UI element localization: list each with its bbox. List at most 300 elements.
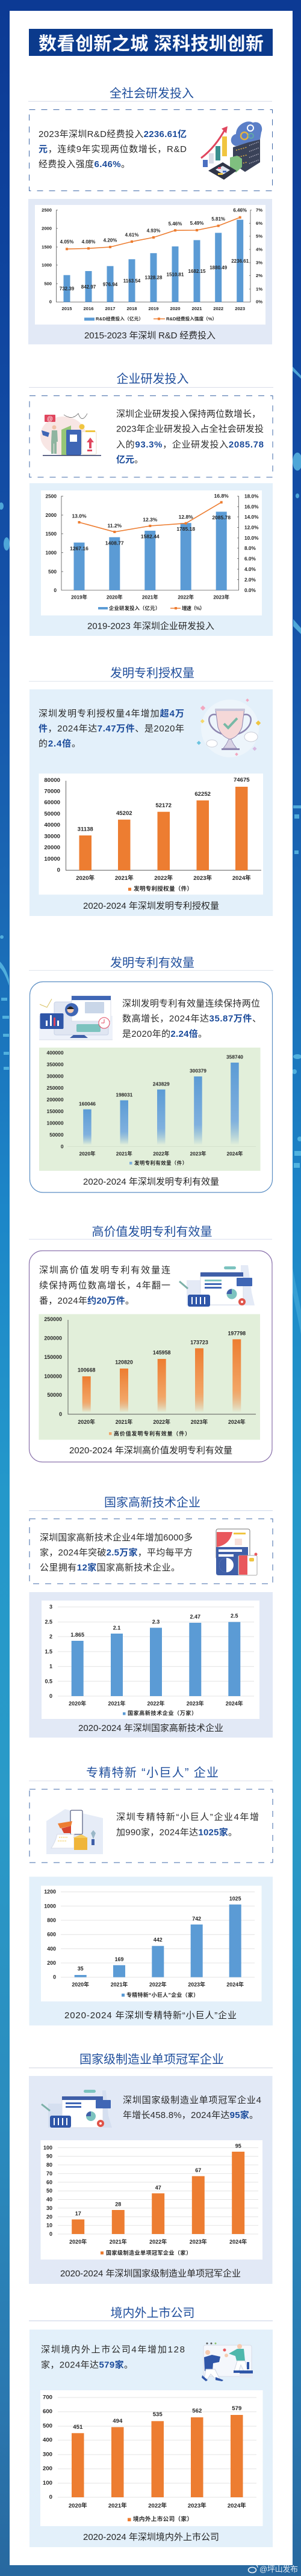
icon: person with documents: [40, 414, 101, 456]
text block: 深圳企业研发投入保持两位数增长，: [116, 409, 261, 420]
text block: 深圳高价值发明专利有效量连: [39, 1265, 170, 1275]
bar chart: valid invention patents: 2022年: [153, 1151, 170, 1157]
combo chart: R&D spending and intensity: 1500: [42, 244, 52, 250]
icon: person with documents: @: [47, 416, 53, 423]
chart panel: [29, 483, 273, 636]
panel: [29, 2330, 273, 2547]
combo chart: R&D spending and intensity: 1328.28: [145, 275, 163, 280]
icon: documents and phone: [216, 1529, 258, 1575]
bar chart: high-value invention patents: 2021年: [116, 1418, 132, 1425]
combo chart: R&D spending and intensity: 5.46%: [169, 221, 182, 227]
bar chart: national high-tech enterprises: 2: [49, 1634, 52, 1640]
bar chart: national high-tech enterprises: 2.5: [231, 1613, 238, 1619]
caption: 2020-2024 年深圳专精特新“小巨人”企业: [64, 2010, 237, 2021]
text block: 加990家，2024年达1025家。: [116, 1827, 237, 1838]
caption: 2019-2023 年深圳企业研发投入: [87, 620, 214, 631]
text block: 家，2024年达579家。: [41, 2360, 133, 2370]
chart panel: [28, 199, 272, 344]
text block: 深圳境内外上市公司4年增加128: [41, 2344, 185, 2355]
bar chart: high-value invention patents: 100000: [44, 1373, 62, 1379]
bar chart: valid invention patents: 0: [61, 1143, 64, 1149]
combo chart: R&D spending and intensity: 3%: [256, 260, 262, 266]
bar chart: little giant enterprises: 1000: [44, 1903, 56, 1909]
combo chart: enterprise R&D and growth: 2022年: [178, 594, 194, 600]
text block: 入的93.3%，企业研发投入2085.78: [116, 439, 264, 450]
heading: 境内外上市公司: [111, 2306, 195, 2320]
bar chart: invention patent grants: 74675: [234, 777, 250, 784]
bar chart: invention patent grants: 2020年: [76, 874, 95, 882]
text block: [116, 1811, 259, 1838]
rounded panel: [30, 982, 272, 1192]
combo chart: R&D spending and intensity: 1510.81: [167, 272, 184, 278]
callout box: [29, 1519, 273, 1584]
combo chart: R&D spending and intensity: 5.81%: [211, 216, 225, 222]
combo chart: R&D spending and intensity: 732.39: [60, 286, 75, 291]
caption: 2020-2024 年深圳国家高新技术企业: [78, 1723, 223, 1733]
bar chart: high-value invention patents: 145958: [153, 1350, 171, 1356]
combo chart: R&D spending and intensity: 2021: [192, 306, 202, 311]
combo chart: R&D spending and intensity: 2019: [149, 306, 158, 311]
bar chart: high-value invention patents: 50000: [47, 1392, 62, 1398]
caption: 2020-2024 年深圳国家级制造业单项冠军企业: [60, 2268, 241, 2279]
bar chart: high-value invention patents: 173723: [190, 1339, 208, 1345]
caption: 2020-2024 年深圳发明专利有效量: [83, 1177, 219, 1187]
bar chart: single-item champions: 28: [115, 2201, 121, 2207]
bar chart: little giant enterprises: 1025: [229, 1896, 241, 1902]
bar chart: single-item champions: [41, 2140, 262, 2260]
combo chart: enterprise R&D and growth: 1000: [46, 549, 57, 555]
bar chart: national high-tech enterprises: 2.1: [113, 1625, 120, 1631]
bar chart: valid invention patents: 300379: [190, 1068, 206, 1074]
combo chart: R&D spending and intensity: 2500: [42, 207, 52, 213]
bar chart: invention patent grants: 20000: [44, 844, 60, 851]
heading: 企业研发投入: [117, 372, 189, 386]
section: 企业研发投入: [29, 372, 273, 636]
legend: 专精特新“小巨人”企业（家）: [126, 1991, 199, 1998]
bar chart: single-item champions: 30: [46, 2205, 52, 2211]
section: 全社会研发投入: [28, 87, 272, 344]
combo chart: R&D spending and intensity: 2017: [105, 306, 115, 311]
combo chart: enterprise R&D and growth: 2021年: [142, 594, 158, 600]
bar chart: national high-tech enterprises: 2.3: [152, 1619, 160, 1625]
bar chart: listed companies: [40, 2390, 262, 2526]
bar chart: single-item champions: 50: [46, 2188, 52, 2194]
combo chart: R&D spending and intensity: 2%: [256, 273, 262, 278]
combo chart: R&D spending and intensity: 2016: [84, 306, 93, 311]
bar chart: little giant enterprises: 442: [154, 1937, 163, 1943]
bar chart: little giant enterprises: 2024年: [226, 1981, 244, 1988]
combo chart: enterprise R&D and growth: 10.0%: [244, 535, 259, 541]
bar chart: little giant enterprises: 0: [53, 1974, 56, 1980]
combo chart: R&D spending and intensity: 5.49%: [190, 221, 203, 226]
section: 专精特新“小巨人”企业: [29, 1766, 273, 2025]
caption: 2020-2024 年深圳发明专利授权量: [83, 901, 219, 911]
callout box: [29, 1789, 273, 1863]
combo chart: R&D spending and intensity: 0%: [256, 299, 262, 304]
combo chart: enterprise R&D and growth: 2019年: [71, 594, 87, 600]
bar chart: national high-tech enterprises: 2022年: [147, 1700, 165, 1707]
combo chart: enterprise R&D and growth: 1408.77: [105, 540, 124, 546]
bar chart: little giant enterprises: 800: [47, 1917, 56, 1923]
combo chart: enterprise R&D and growth: 1267.16: [70, 545, 88, 551]
title banner: 数看创新之城 深科技圳创新: [39, 34, 264, 54]
bar chart: listed companies: 2024年: [228, 2502, 246, 2509]
bar chart: listed companies: 2022年: [148, 2502, 167, 2509]
bar chart: little giant enterprises: 2021年: [111, 1981, 128, 1988]
combo chart: R&D spending and intensity: 0: [49, 299, 52, 304]
bar chart: little giant enterprises: 1200: [44, 1889, 56, 1895]
bar chart: listed companies: 200: [43, 2465, 52, 2472]
text block: 数高增长，2024年达35.87万件、: [122, 1013, 261, 1024]
bar chart: valid invention patents: 358740: [226, 1054, 243, 1060]
callout box: [29, 109, 272, 191]
bar chart: listed companies: 600: [43, 2408, 52, 2415]
combo chart: enterprise R&D and growth: 13.0%: [72, 513, 87, 519]
text block: 深圳专精特新“小巨人”企业4年增: [116, 1811, 259, 1822]
bar chart: invention patent grants: 0: [57, 867, 60, 874]
bar chart: invention patent grants: 2023年: [193, 874, 213, 882]
bar chart: listed companies: 562: [192, 2408, 202, 2414]
bar chart: high-value invention patents: 2020年: [78, 1418, 95, 1425]
bar chart: little giant enterprises: 400: [47, 1946, 56, 1952]
bar chart: listed companies: 100: [43, 2480, 52, 2486]
combo chart: enterprise R&D and growth: 500: [48, 569, 57, 575]
text block: [39, 129, 187, 169]
text block: 番，2024年约20万件。: [39, 1296, 134, 1306]
combo chart: enterprise R&D and growth: 1582.44: [141, 534, 160, 540]
bar chart: single-item champions: 60: [46, 2179, 52, 2185]
icon: cloud server and growth chart: [201, 121, 262, 180]
bar chart: national high-tech enterprises: 2020年: [69, 1700, 86, 1707]
combo chart: R&D spending and intensity: 4.05%: [60, 239, 73, 245]
bar chart: single-item champions: 80: [46, 2162, 52, 2168]
bar chart: little giant enterprises: 600: [47, 1932, 56, 1938]
combo chart: enterprise R&D and growth: 1500: [46, 531, 57, 537]
icon: trophy: [197, 698, 261, 757]
combo chart: R&D spending and intensity: 4.61%: [125, 232, 138, 238]
bar chart: invention patent grants: [39, 774, 263, 894]
bar chart: valid invention patents: 400000: [47, 1049, 64, 1055]
combo chart: R&D spending and intensity: 5%: [256, 233, 262, 239]
bar chart: high-value invention patents: 150000: [44, 1354, 62, 1360]
bar chart: listed companies: 500: [43, 2423, 52, 2429]
chart panel: [29, 1592, 273, 1738]
bar chart: national high-tech enterprises: 2.5: [45, 1619, 52, 1625]
bar chart: little giant enterprises: [41, 1886, 261, 2001]
section: 高价值发明专利有效量: [29, 1225, 272, 1462]
bar chart: valid invention patents: 250000: [47, 1085, 64, 1091]
bar chart: national high-tech enterprises: 1.5: [45, 1649, 52, 1655]
bar chart: single-item champions: 17: [75, 2211, 81, 2217]
bar chart: listed companies: 494: [113, 2418, 123, 2425]
combo chart: R&D spending and intensity: 842.97: [81, 284, 96, 290]
bar chart: single-item champions: 40: [46, 2196, 52, 2202]
bar chart: invention patent grants: 30000: [44, 833, 60, 840]
combo chart: enterprise R&D and growth: 2023年: [213, 594, 229, 600]
bar chart: listed companies: 400: [43, 2437, 52, 2444]
bar chart: invention patent grants: 2022年: [154, 874, 173, 882]
combo chart: enterprise R&D and growth: 18.0%: [244, 493, 259, 499]
text block: [123, 2095, 261, 2120]
bar chart: single-item champions: 70: [46, 2170, 52, 2176]
combo chart: R&D spending and intensity: 2236.61: [231, 258, 249, 264]
text block: 件，2024年达7.47万件、是2020年: [39, 724, 184, 734]
bar chart: valid invention patents: 243829: [153, 1081, 170, 1087]
bar chart: valid invention patents: 2024年: [226, 1151, 243, 1157]
bar chart: little giant enterprises: 742: [192, 1915, 201, 1921]
bar chart: valid invention patents: 100000: [47, 1120, 64, 1126]
bar chart: national high-tech enterprises: 1.865: [70, 1632, 84, 1638]
bar chart: national high-tech enterprises: 2024年: [226, 1700, 243, 1707]
bar chart: invention patent grants: 50000: [44, 811, 60, 817]
bar chart: single-item champions: 67: [195, 2167, 201, 2173]
text block: 2023年深圳R&D经费投入2236.61亿: [39, 129, 187, 139]
heading: 国家高新技术企业: [104, 1495, 200, 1510]
section: 境内外上市公司: [29, 2306, 273, 2547]
combo chart: enterprise R&D and growth: 0.0%: [244, 587, 256, 593]
combo chart: R&D spending and intensity: 4%: [256, 246, 262, 252]
bar chart: high-value invention patents: 120820: [115, 1360, 133, 1366]
icon: monitor dashboard with avatar: [39, 996, 113, 1040]
bar chart: invention patent grants: 40000: [44, 822, 60, 828]
heading: 国家级制造业单项冠军企业: [79, 2053, 224, 2066]
bar chart: invention patent grants: 2021年: [115, 874, 134, 882]
text block: [41, 2344, 185, 2370]
combo chart: R&D spending and intensity: 4.20%: [104, 238, 117, 243]
text block: [40, 1532, 193, 1573]
bar chart: single-item champions: 95: [235, 2143, 241, 2149]
heading: 全社会研发投入: [110, 87, 194, 100]
bar chart: single-item champions: 100: [43, 2144, 52, 2150]
bar chart: invention patent grants: 31138: [78, 826, 93, 833]
bar chart: national high-tech enterprises: [42, 1601, 259, 1719]
caption: 2020-2024 年深圳高价值发明专利有效量: [69, 1445, 232, 1456]
bar chart: valid invention patents: [39, 1048, 260, 1171]
heading: 发明专利有效量: [110, 956, 194, 970]
text block: [39, 708, 184, 749]
icon: two people shaking hands: [202, 2343, 253, 2381]
combo chart: R&D spending and intensity: 2018: [127, 306, 137, 311]
combo chart: enterprise R&D and growth: 1785.18: [176, 526, 195, 532]
bar chart: national high-tech enterprises: 2021年: [108, 1700, 126, 1707]
legend: [98, 605, 205, 611]
bar chart: listed companies: 2021年: [108, 2502, 127, 2509]
bar chart: single-item champions: 2020年: [69, 2238, 87, 2245]
bar chart: national high-tech enterprises: 1: [49, 1664, 52, 1670]
bar chart: invention patent grants: 52172: [155, 802, 172, 809]
bar chart: high-value invention patents: [39, 1314, 260, 1440]
text block: [122, 999, 261, 1039]
caption: 2015-2023 年深圳 R&D 经费投入: [84, 331, 216, 341]
bar chart: valid invention patents: 150000: [47, 1108, 64, 1114]
text block: [116, 409, 264, 465]
legend: 高价值发明专利有效量（件）: [114, 1430, 190, 1436]
text block: 续保持两位数高增长，4年翻一: [39, 1280, 170, 1291]
bar chart: valid invention patents: 2023年: [190, 1151, 206, 1157]
legend: 企业研发投入（亿元）: [109, 605, 160, 611]
combo chart: R&D spending and intensity: [42, 207, 262, 322]
icon: report document with charts: [179, 1265, 255, 1307]
legend: R&D经费投入强度（%）: [166, 316, 217, 322]
heading: 专精特新 “小巨人” 企业: [86, 1766, 219, 1780]
text block: 元，连续9年实现两位数增长，R&D: [39, 144, 187, 154]
bar chart: invention patent grants: 45202: [116, 810, 132, 817]
combo chart: R&D spending and intensity: 1000: [42, 262, 52, 268]
bar chart: single-item champions: 2023年: [190, 2238, 207, 2245]
combo chart: enterprise R&D and growth: [46, 493, 259, 611]
combo chart: enterprise R&D and growth: 16.8%: [214, 493, 229, 499]
caption: 2020-2024 年深圳境内外上市公司: [83, 2532, 219, 2542]
combo chart: enterprise R&D and growth: 14.0%: [244, 514, 259, 520]
text block: 深圳发明专利授权量4年增加超4万: [39, 708, 184, 719]
combo chart: R&D spending and intensity: 6.46%: [233, 208, 247, 213]
combo chart: enterprise R&D and growth: 12.8%: [179, 514, 193, 520]
panel: [29, 2076, 272, 2284]
bar chart: single-item champions: 10: [46, 2223, 52, 2229]
bar chart: high-value invention patents: 100668: [78, 1367, 96, 1373]
bar chart: little giant enterprises: 200: [47, 1960, 56, 1966]
chart panel: [29, 1876, 273, 2025]
combo chart: R&D spending and intensity: 1%: [256, 286, 262, 292]
bar chart: national high-tech enterprises: 0.5: [45, 1678, 52, 1684]
bar chart: high-value invention patents: 2024年: [228, 1418, 246, 1425]
combo chart: enterprise R&D and growth: 11.2%: [107, 522, 122, 528]
text block: 是2020年的2.24倍。: [122, 1028, 207, 1039]
legend: [84, 316, 217, 322]
combo chart: enterprise R&D and growth: 8.0%: [244, 545, 256, 551]
bar chart: high-value invention patents: 197798: [228, 1330, 246, 1336]
bar chart: listed companies: 2020年: [69, 2502, 87, 2509]
combo chart: enterprise R&D and growth: 2.0%: [244, 577, 256, 583]
text block: 经费投入强度6.46%。: [39, 159, 130, 169]
title banner: [29, 29, 273, 56]
combo chart: R&D spending and intensity: 1163.54: [123, 278, 141, 284]
bar chart: listed companies: 700: [43, 2394, 52, 2401]
bar chart: listed companies: 2023年: [188, 2502, 206, 2509]
combo chart: R&D spending and intensity: 1880.49: [209, 265, 228, 270]
combo chart: R&D spending and intensity: 500: [44, 281, 52, 286]
bar chart: little giant enterprises: 35: [78, 1966, 84, 1972]
bar chart: valid invention patents: 50000: [49, 1132, 64, 1138]
section: 国家高新技术企业: [29, 1495, 273, 1738]
text block: 亿元。: [116, 454, 143, 465]
combo chart: enterprise R&D and growth: 4.0%: [244, 566, 256, 572]
combo chart: R&D spending and intensity: 6%: [256, 221, 262, 226]
callout box: [29, 395, 273, 477]
text block: 家，2024年突破2.5万家，平均每平方: [40, 1547, 193, 1558]
text block: 的2.4倍。: [39, 738, 81, 749]
bar chart: valid invention patents: 350000: [47, 1061, 64, 1067]
combo chart: enterprise R&D and growth: 0: [54, 587, 57, 593]
bar chart: invention patent grants: 60000: [44, 799, 60, 806]
bar chart: invention patent grants: 70000: [44, 789, 60, 795]
panel: [29, 689, 273, 916]
heading: 高价值发明专利有效量: [92, 1225, 212, 1239]
combo chart: R&D spending and intensity: 2015: [62, 306, 72, 311]
bar chart: national high-tech enterprises: 0: [49, 1693, 52, 1699]
bar chart: single-item champions: 2024年: [229, 2238, 247, 2245]
bar chart: invention patent grants: 2024年: [232, 874, 251, 882]
bar chart: high-value invention patents: 2023年: [191, 1418, 208, 1425]
legend: 国家高新技术企业（万家）: [128, 1710, 197, 1717]
section: 发明专利授权量: [29, 666, 273, 916]
bar chart: national high-tech enterprises: 2023年: [187, 1700, 204, 1707]
bar chart: listed companies: 579: [232, 2405, 241, 2412]
combo chart: enterprise R&D and growth: 2000: [46, 512, 57, 518]
bar chart: listed companies: 0: [49, 2494, 52, 2500]
bar chart: valid invention patents: 2020年: [79, 1151, 96, 1157]
bar chart: single-item champions: 47: [155, 2185, 161, 2191]
icon: phone, calendar and box: [46, 1809, 103, 1854]
combo chart: enterprise R&D and growth: 2500: [46, 493, 57, 499]
legend: 发明专利有效量（件）: [134, 1160, 187, 1166]
bar chart: valid invention patents: 2021年: [116, 1151, 132, 1157]
bar chart: single-item champions: 0: [49, 2231, 52, 2237]
section: 国家级制造业单项冠军企业: [29, 2053, 273, 2284]
text block: 公里拥有12家国家高新技术企业。: [40, 1562, 180, 1573]
bar chart: little giant enterprises: 2022年: [149, 1981, 167, 1988]
heading: 发明专利授权量: [110, 666, 194, 680]
bar chart: little giant enterprises: 2020年: [72, 1981, 89, 1988]
combo chart: enterprise R&D and growth: 12.3%: [143, 516, 158, 522]
combo chart: R&D spending and intensity: 4.08%: [82, 239, 95, 245]
combo chart: R&D spending and intensity: 4.93%: [147, 228, 160, 233]
bar chart: little giant enterprises: 169: [115, 1956, 123, 1962]
legend: 增速（%）: [182, 605, 205, 611]
legend: 境内外上市公司（家）: [133, 2516, 193, 2523]
combo chart: R&D spending and intensity: 2020: [170, 306, 180, 311]
combo chart: R&D spending and intensity: 2023: [235, 306, 245, 311]
bar chart: valid invention patents: 160046: [79, 1100, 96, 1106]
legend: 发明专利授权量（件）: [134, 885, 193, 893]
bar chart: high-value invention patents: 250000: [44, 1316, 62, 1322]
bar chart: listed companies: 535: [153, 2411, 163, 2418]
bar chart: invention patent grants: 62252: [194, 791, 211, 798]
combo chart: enterprise R&D and growth: 12.0%: [244, 524, 259, 530]
bar chart: high-value invention patents: 0: [59, 1411, 62, 1417]
bar chart: valid invention patents: 300000: [47, 1073, 64, 1079]
bar chart: invention patent grants: 80000: [44, 777, 60, 784]
bar chart: single-item champions: 90: [46, 2153, 52, 2159]
section: 发明专利有效量: [29, 956, 273, 1192]
bar chart: high-value invention patents: 200000: [44, 1335, 62, 1341]
bar chart: listed companies: 451: [73, 2424, 83, 2431]
combo chart: R&D spending and intensity: 2000: [42, 226, 52, 231]
bar chart: single-item champions: 2021年: [110, 2238, 127, 2245]
text block: 年增长458.8%，2024年达95家。: [123, 2110, 258, 2120]
bar chart: little giant enterprises: 2023年: [188, 1981, 205, 1988]
background decoration: light streaks: [0, 367, 301, 1334]
bar chart: single-item champions: 2022年: [149, 2238, 167, 2245]
combo chart: enterprise R&D and growth: 6.0%: [244, 555, 256, 561]
text block: 深圳国家高新技术企业4年增加6000多: [40, 1532, 193, 1543]
bar chart: single-item champions: 20: [46, 2214, 52, 2220]
legend: 国家级制造业单项冠军企业（家）: [106, 2249, 191, 2256]
bar chart: national high-tech enterprises: 3: [49, 1604, 52, 1610]
combo chart: R&D spending and intensity: 7%: [256, 207, 262, 213]
bar chart: valid invention patents: 198031: [116, 1092, 133, 1098]
text block: 2023年企业研发投入占全社会研发投: [116, 423, 264, 434]
combo chart: R&D spending and intensity: 2022: [213, 306, 223, 311]
combo chart: R&D spending and intensity: 1682.15: [188, 269, 206, 274]
bar chart: invention patent grants: 10000: [44, 856, 60, 862]
combo chart: enterprise R&D and growth: 2020年: [107, 594, 123, 600]
rounded panel: [29, 1251, 272, 1462]
combo chart: R&D spending and intensity: 976.94: [103, 282, 118, 287]
bar chart: valid invention patents: 200000: [47, 1097, 64, 1103]
watermark: Weibo handle: @坪山发布: [259, 2565, 298, 2574]
combo chart: enterprise R&D and growth: 2085.78: [212, 514, 231, 520]
